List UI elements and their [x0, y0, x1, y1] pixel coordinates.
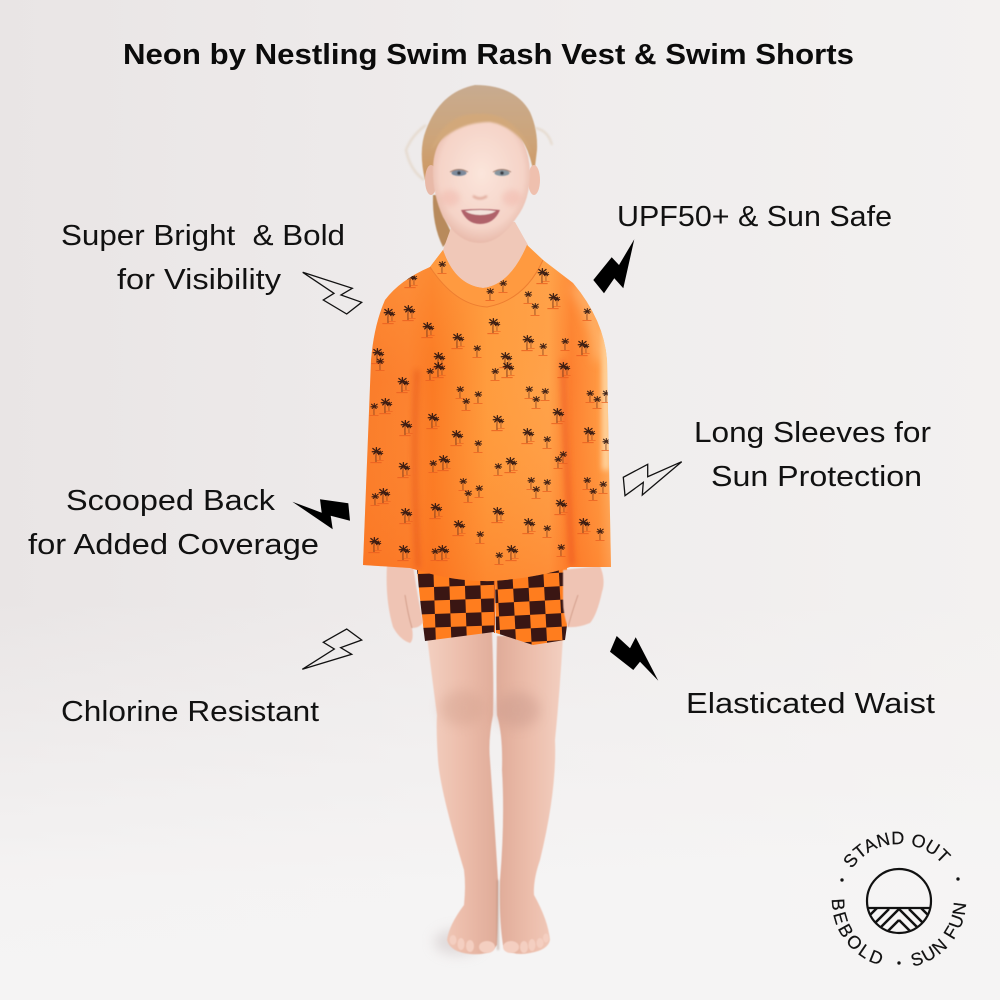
- title: Neon by Nestling Swim Rash Vest & Swim Shorts: [123, 39, 854, 71]
- label text: for Visibility: [117, 264, 282, 296]
- label text: Sun Protection: [711, 461, 922, 493]
- ears: [425, 165, 437, 195]
- label text: UPF50+ & Sun Safe: [617, 201, 892, 233]
- hair: [422, 85, 537, 180]
- palm tree print: [368, 262, 610, 564]
- badge emblem: [866, 869, 932, 933]
- badge text: STAND OUT: [844, 832, 952, 867]
- smile: [461, 209, 500, 224]
- floor shadow: [434, 929, 482, 955]
- label text: Chlorine Resistant: [61, 696, 319, 728]
- label text: Long Sleeves for: [694, 417, 931, 449]
- badge text: SUN FUN: [911, 902, 966, 966]
- callout: UPF50+: [593, 201, 892, 293]
- callout: chlorine resistant: [61, 629, 362, 728]
- fringe: [431, 114, 533, 155]
- icon: outlined lightning bolt: [303, 272, 362, 314]
- callout: elasticated waist: [610, 636, 935, 720]
- nose: [473, 196, 487, 198]
- callout: bright and bold: [61, 220, 362, 314]
- label text: Scooped Back: [66, 485, 276, 517]
- hands: [387, 565, 604, 643]
- head: [406, 85, 552, 243]
- collar band: [430, 245, 543, 299]
- badge text: [832, 832, 966, 966]
- label text: for Added Coverage: [28, 529, 319, 561]
- label text: [61, 220, 345, 296]
- icon: outlined lightning bolt: [302, 629, 362, 669]
- brand badge logo: [832, 832, 966, 966]
- face: [433, 117, 530, 243]
- label text: Super Bright & Bold: [61, 220, 345, 252]
- swim shorts: [417, 568, 569, 645]
- ponytail: [433, 195, 451, 247]
- neck: [443, 222, 528, 292]
- icon: black lightning bolt: [292, 499, 350, 529]
- eyes: [450, 170, 511, 176]
- icon: black lightning bolt: [593, 239, 634, 293]
- label text: Elasticated Waist: [686, 688, 935, 720]
- icon: outlined lightning bolt: [623, 462, 682, 496]
- girl photo illustration: [360, 85, 615, 955]
- badge text: BEBOLD: [832, 900, 882, 964]
- icon: black lightning bolt: [610, 636, 658, 681]
- cheeks: [440, 190, 522, 206]
- callout: scooped back: [28, 485, 350, 561]
- long sleeve rash vest: [360, 245, 615, 585]
- legs: [427, 632, 563, 954]
- label text: [28, 485, 319, 561]
- label text: [694, 417, 931, 493]
- callout: long sleeves: [623, 417, 931, 496]
